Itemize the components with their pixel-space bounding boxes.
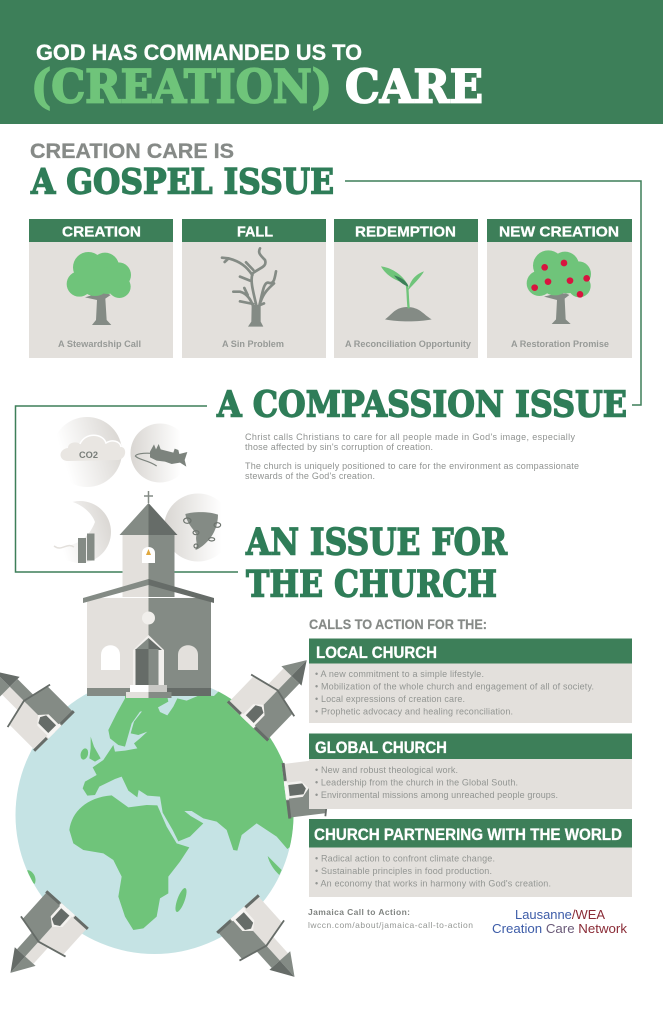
- panel: new creation: A Restoration Promise: [511, 339, 609, 349]
- steps: [130, 685, 148, 692]
- panel: local church: • Mobilization of the whole church and engagement of all of society.: [315, 682, 594, 692]
- panel: creation: [29, 219, 173, 358]
- panel: local church: • Local expressions of creation care.: [315, 694, 465, 704]
- title: (Creation): (CREATION): [31, 60, 332, 114]
- panel: redemption: A Reconciliation Opportunity: [345, 339, 471, 349]
- logo: Lausanne/WEA Creation Care Network: [492, 907, 628, 936]
- icon: green tree: [67, 252, 131, 325]
- rose window: [142, 612, 155, 624]
- small church: lower right: [215, 893, 317, 997]
- panel: church partnering with the world: • Sustainable principles in food production.: [315, 866, 492, 876]
- land: Eurasia: [82, 692, 294, 851]
- heading: an issue for the church: AN ISSUE FOR: [245, 520, 508, 564]
- heading: an issue for the church: THE CHURCH: [246, 562, 497, 606]
- panel: global church: [309, 734, 632, 809]
- panel: local church: • Prophetic advocacy and healing reconciliation.: [315, 706, 513, 716]
- panel: creation: CREATION: [62, 224, 141, 240]
- panel: church partnering with the world: [309, 819, 632, 897]
- panel: fall: A Sin Problem: [222, 339, 284, 349]
- panel: creation: A Stewardship Call: [58, 339, 141, 349]
- text block: compassion: those affected by sin's corruption of creation.: [245, 442, 433, 452]
- panel: new creation: [487, 219, 632, 358]
- land: Madagascar: [176, 888, 186, 912]
- icon: sprout in soil: [381, 266, 432, 321]
- icon: CO2 cloud: [52, 417, 125, 487]
- small church: upper right: [225, 639, 328, 743]
- icon: dead tree: [222, 248, 276, 327]
- icon: CO2 cloud: CO2: [79, 450, 98, 461]
- heading: creation care is a gospel issue: CREATION CARE IS: [30, 140, 234, 163]
- footer: source link: lwccn.com/about/jamaica-call-to-action: [308, 920, 473, 930]
- panel: local church: [309, 638, 632, 723]
- land: Great Britain: [89, 737, 101, 762]
- globe illustration: [16, 676, 300, 954]
- logo: Lausanne/WEA Creation Care Network: Creation Care Network: [492, 921, 628, 936]
- land: Sumatra: [268, 856, 282, 875]
- text block: compassion: stewards of the God's creation.: [245, 471, 375, 481]
- heading: creation care is a gospel issue: [30, 140, 334, 202]
- text block: compassion: The church is uniquely positioned to care for the environment as compassionate: [245, 461, 579, 471]
- small church: right: [281, 751, 374, 821]
- bell window: [142, 547, 155, 563]
- main church illustration: [83, 491, 214, 698]
- text block: compassion: Christ calls Christians to care for all people made in God's image, especially: [245, 432, 576, 442]
- footer: source link: Jamaica Call to Action:: [308, 907, 410, 917]
- land: Ireland: [80, 748, 88, 760]
- header line: God has commanded us to: GOD HAS COMMANDED US TO: [36, 40, 362, 65]
- panel: local church: • A new commitment to a simple lifestyle.: [315, 669, 484, 679]
- panel: global church: • New and robust theological work.: [315, 765, 458, 775]
- door and portico: [133, 635, 164, 686]
- panel: global church: • Environmental missions among unreached people groups.: [315, 790, 558, 800]
- panel: new creation: NEW CREATION: [499, 224, 619, 240]
- heading: a compassion issue: A COMPASSION ISSUE: [216, 384, 627, 426]
- small church: upper left: [0, 650, 76, 753]
- nave roof: [83, 579, 148, 603]
- icon: factory smoke: [46, 499, 111, 563]
- heading: creation care is a gospel issue: A GOSPEL ISSUE: [30, 162, 334, 202]
- tower: [122, 535, 148, 597]
- icon: tornado: [164, 494, 232, 562]
- logo: Lausanne/WEA Creation Care Network: Lausanne/WEA: [515, 907, 605, 922]
- land: South America edge: [27, 870, 36, 884]
- panel: church partnering with the world: • Radical action to confront climate change.: [315, 854, 495, 864]
- cross: [144, 491, 153, 503]
- nave: [87, 598, 148, 690]
- connector line: compassion to church: [16, 406, 238, 572]
- panel: church partnering with the world: CHURCH PARTNERING WITH THE WORLD: [314, 825, 622, 844]
- panel: redemption: REDEMPTION: [355, 224, 456, 240]
- panel: church partnering with the world: • An economy that works in harmony with God's creation.: [315, 878, 551, 888]
- panel: global church: GLOBAL CHURCH: [315, 738, 447, 757]
- icon: dead animal: [130, 424, 190, 482]
- label: calls to action: CALLS TO ACTION FOR THE:: [309, 617, 487, 632]
- heading: an issue for the church: [245, 520, 508, 606]
- land: Africa: [69, 795, 189, 930]
- footer: source link: [308, 907, 473, 930]
- panel: redemption: [334, 219, 478, 358]
- title: Care: CARE: [345, 60, 483, 114]
- connector line: gospel to compassion: [345, 181, 641, 405]
- small church: lower left: [0, 889, 90, 993]
- panel: fall: [182, 219, 326, 358]
- text block: compassion: [245, 432, 579, 481]
- windows: [101, 645, 120, 670]
- panel: local church: LOCAL CHURCH: [316, 643, 437, 662]
- icon: fruit tree: [527, 250, 591, 324]
- panel: fall: FALL: [237, 224, 273, 240]
- panel: global church: • Leadership from the church in the Global South.: [315, 778, 518, 788]
- header banner: [0, 0, 663, 124]
